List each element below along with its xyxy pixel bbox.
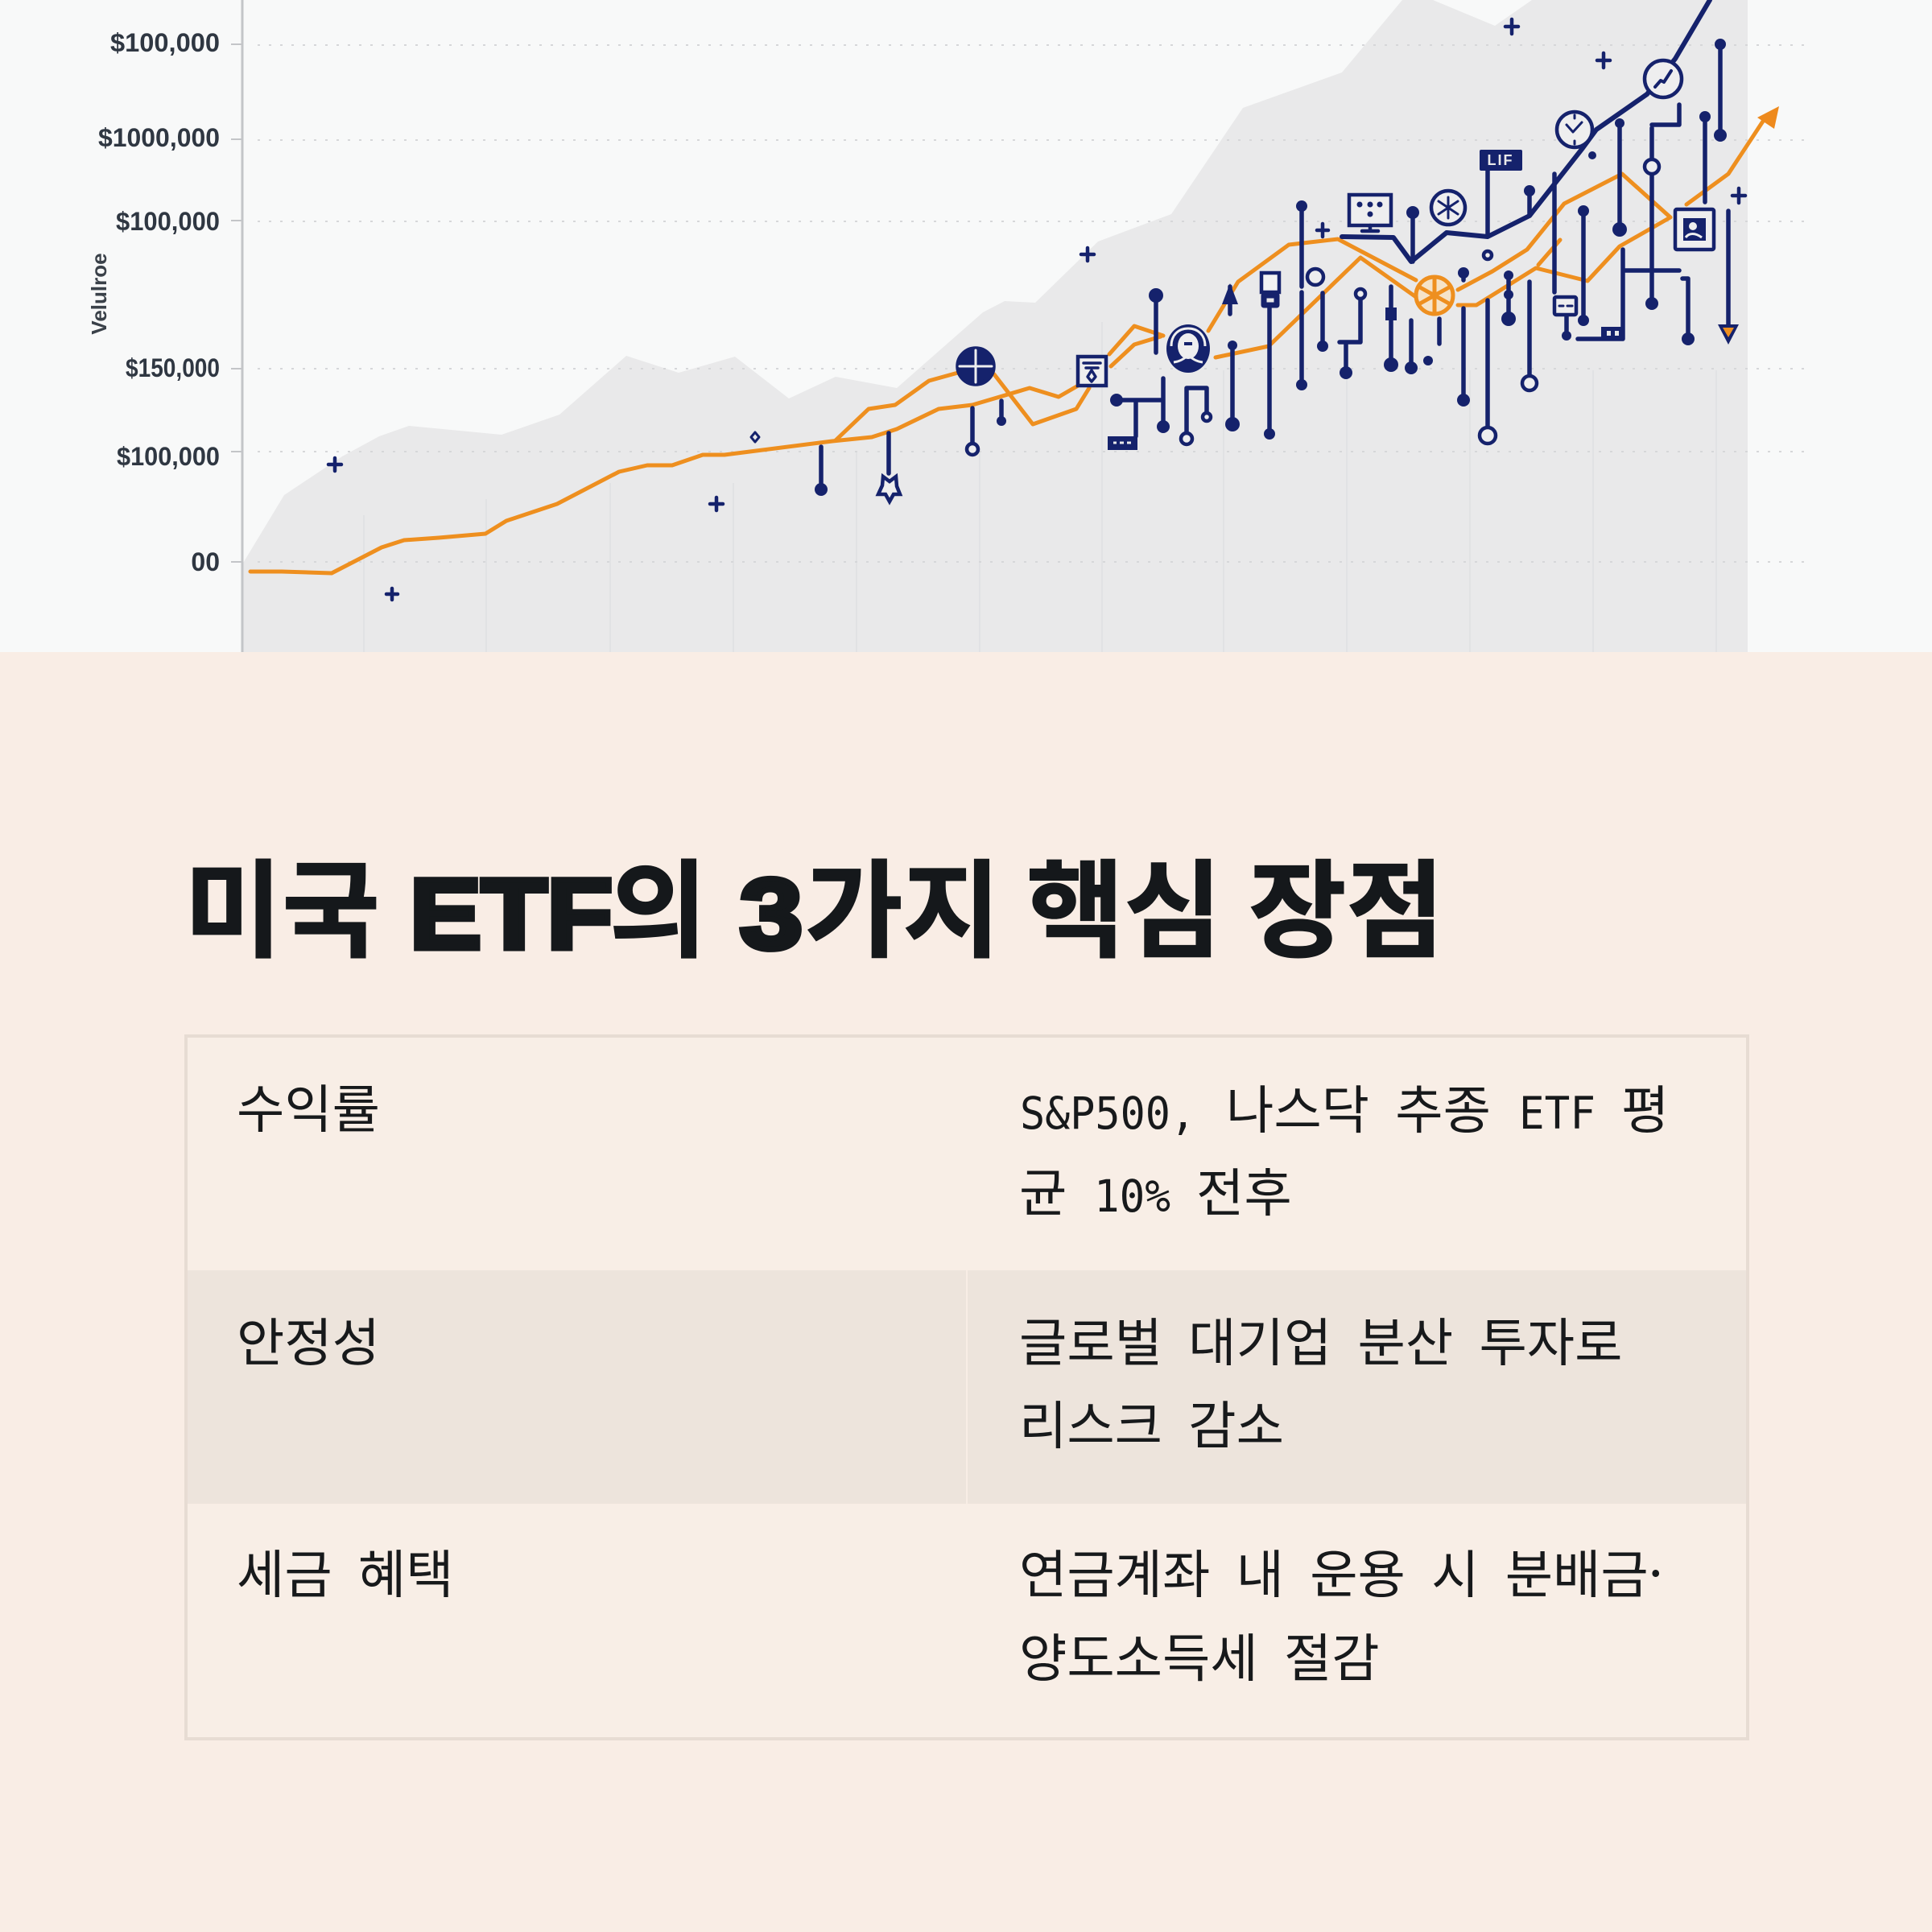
row 1: 수익률: 평 (1621, 1068, 1669, 1144)
navy growth line (1342, 0, 1710, 262)
row 3: 세금 혜택: 양도소득세 절감 (1019, 1616, 1380, 1692)
heading: 의 (609, 852, 707, 971)
row 2: 안정성: 리스크 감소 (1019, 1384, 1284, 1459)
icon: bracket block (1601, 327, 1624, 339)
row 1: 수익률: S&P500, (1020, 1088, 1195, 1139)
navy stems and nodes (821, 44, 1728, 489)
plus markers (328, 19, 1745, 600)
icon: up arrow (1222, 283, 1238, 304)
y axis: 00 (191, 547, 220, 576)
heading: 장점 (1249, 852, 1444, 971)
icon: monitor (1349, 195, 1391, 231)
icon: small chip (1554, 297, 1576, 315)
heading: 미국 (184, 852, 380, 971)
row 1: 수익률: 나스닥 추종 (1226, 1068, 1491, 1144)
table (186, 1036, 1748, 1739)
icon: document square (1078, 357, 1106, 386)
row 1: 수익률: 균 (1019, 1151, 1067, 1227)
icon: dark label (1480, 150, 1522, 171)
orange return lines (250, 115, 1767, 573)
heading (184, 852, 1444, 971)
icon: orange arrow head (1757, 106, 1779, 129)
heading: 가지 (805, 852, 1001, 971)
heading: ETF (410, 859, 613, 970)
row 1: 수익률: 10% (1094, 1170, 1170, 1222)
row 2: 안정성 (237, 1301, 1623, 1459)
row 2 shading (188, 1270, 1746, 1504)
icon: badge (878, 477, 900, 502)
panel: line chart (0, 0, 1932, 652)
icon: clock (1557, 112, 1592, 147)
icon: globe (958, 349, 993, 384)
y axis: $1000,000 (98, 123, 220, 152)
icon: spoked wheel (1431, 191, 1465, 225)
y axis (87, 0, 242, 652)
icon: screen block (1261, 273, 1279, 305)
y axis: $100,000 (110, 28, 220, 57)
icon: orange wheel (1416, 277, 1453, 314)
y axis: Velulroe (87, 253, 111, 335)
row 2: 안정성: 글로벌 대기업 분산 투자로 (1019, 1301, 1623, 1377)
icon: dark label: LIF (1488, 152, 1513, 168)
row 2: 안정성: 안정성 (237, 1301, 380, 1377)
y axis: $100,000 (117, 442, 220, 471)
icon: chart circle (1645, 60, 1682, 97)
y axis: $150,000 (126, 353, 220, 382)
icon: down triangle (1718, 324, 1739, 345)
icon: robot head (1166, 324, 1210, 373)
row 1: 수익률: 수익률 (237, 1067, 380, 1143)
row 1: 수익률 (237, 1067, 1669, 1227)
area: background range (242, 0, 1748, 652)
row 3: 세금 혜택: 세금 혜택 (237, 1533, 454, 1608)
heading: 핵심 (1026, 852, 1222, 971)
row 3: 세금 혜택 (237, 1533, 1663, 1692)
heading: 3 (740, 859, 803, 970)
y axis: $100,000 (116, 207, 220, 236)
row 1: 수익률: ETF (1519, 1088, 1596, 1139)
row 3: 세금 혜택: 연금계좌 내 운용 시 분배금· (1019, 1533, 1663, 1608)
icon: photo frame (1675, 209, 1714, 250)
row 1: 수익률: 전후 (1196, 1151, 1292, 1227)
icon: small tag (1108, 436, 1137, 450)
